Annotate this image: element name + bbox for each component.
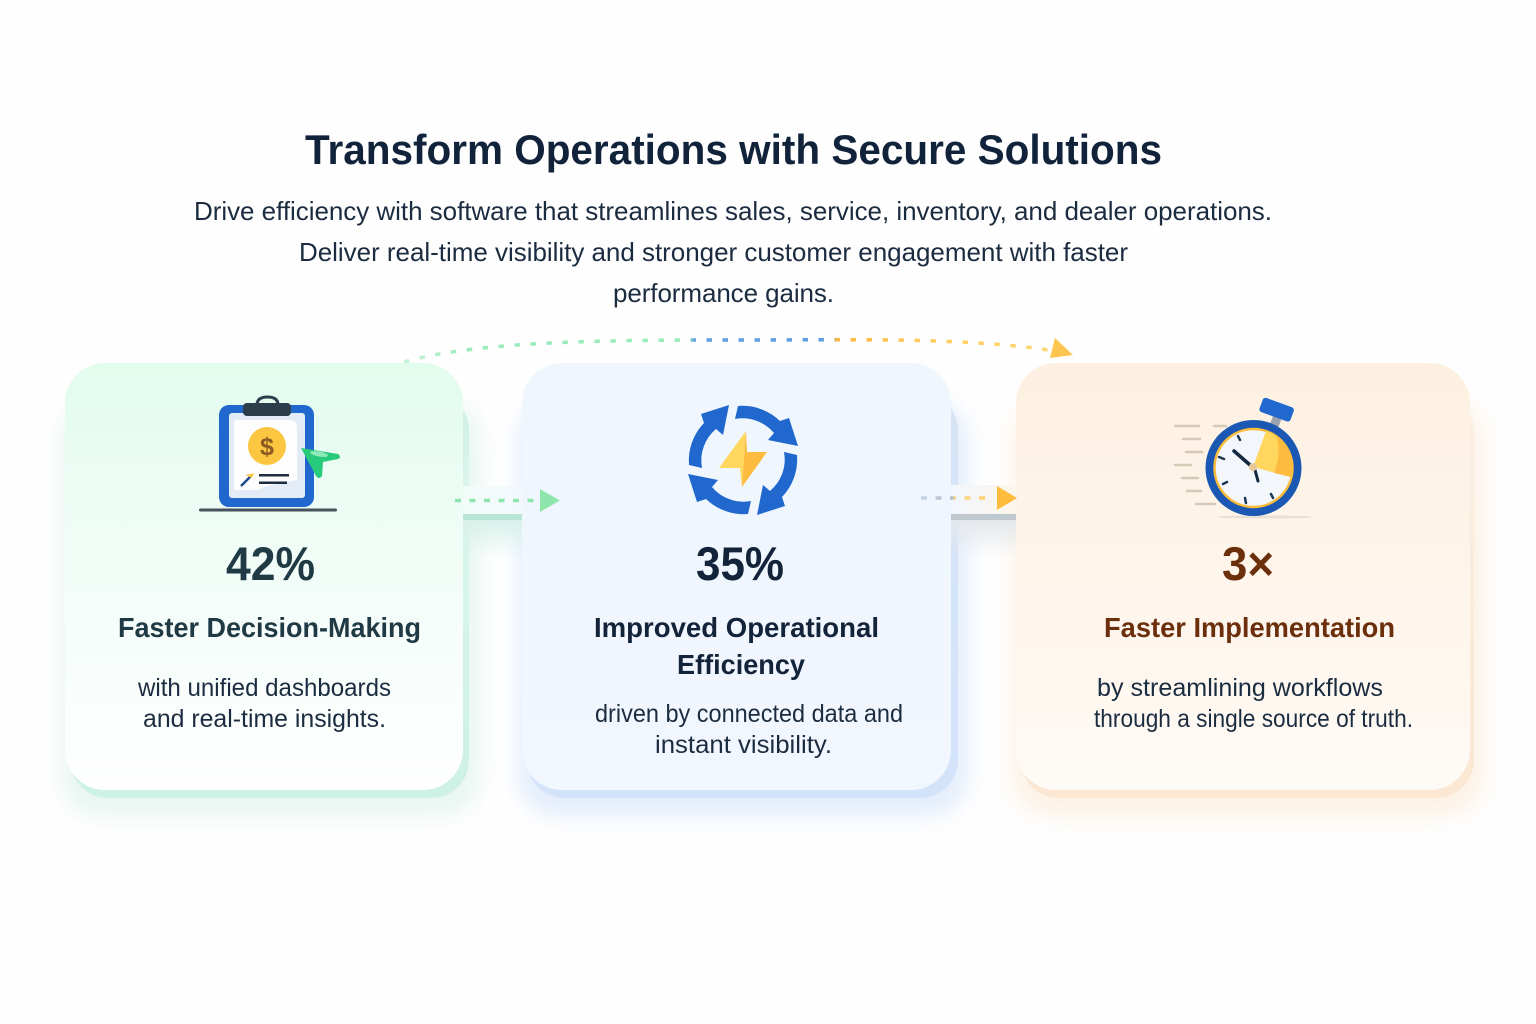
description bbox=[595, 700, 903, 759]
connector: blue to orange arrow bbox=[921, 485, 1017, 558]
panel: faster decision-making bbox=[62, 363, 480, 816]
stat: 35%: 35% bbox=[696, 537, 784, 590]
description: and real-time insights. bbox=[143, 705, 386, 733]
subtitle: Drive efficiency with software that streamlines sales, service, inventory, and dealer operations. bbox=[194, 196, 1272, 226]
connector: green arrow bbox=[455, 486, 560, 558]
heading bbox=[594, 612, 879, 680]
subtitle: Deliver real-time visibility and stronger customer engagement with faster bbox=[299, 237, 1128, 267]
description: instant visibility. bbox=[655, 731, 832, 759]
description bbox=[1094, 674, 1413, 733]
title: Transform Operations with Secure Solutions bbox=[305, 126, 1162, 173]
subtitle bbox=[194, 196, 1272, 308]
heading: Faster Decision-Making bbox=[118, 612, 421, 643]
description: driven by connected data and bbox=[595, 700, 903, 728]
description: by streamlining workflows bbox=[1097, 674, 1383, 702]
icon: clipboard with coin bbox=[199, 397, 340, 512]
curved dotted arrow across top bbox=[404, 338, 1073, 362]
icon: clipboard with coin: $ bbox=[260, 433, 274, 461]
icon: sync arrows with bolt bbox=[688, 405, 798, 515]
subtitle: performance gains. bbox=[613, 278, 834, 308]
description bbox=[137, 674, 391, 733]
stat: 3x: 3× bbox=[1222, 537, 1274, 590]
description: with unified dashboards bbox=[137, 674, 391, 702]
stat: 42%: 42% bbox=[226, 537, 315, 590]
description: through a single source of truth. bbox=[1094, 705, 1413, 733]
panel: improved operational efficiency bbox=[518, 363, 968, 816]
heading: Faster Implementation bbox=[1104, 612, 1395, 643]
heading: Efficiency bbox=[677, 649, 805, 680]
panel: faster implementation bbox=[1012, 363, 1484, 816]
heading: Improved Operational bbox=[594, 612, 879, 643]
icon: stopwatch bbox=[1175, 397, 1313, 518]
